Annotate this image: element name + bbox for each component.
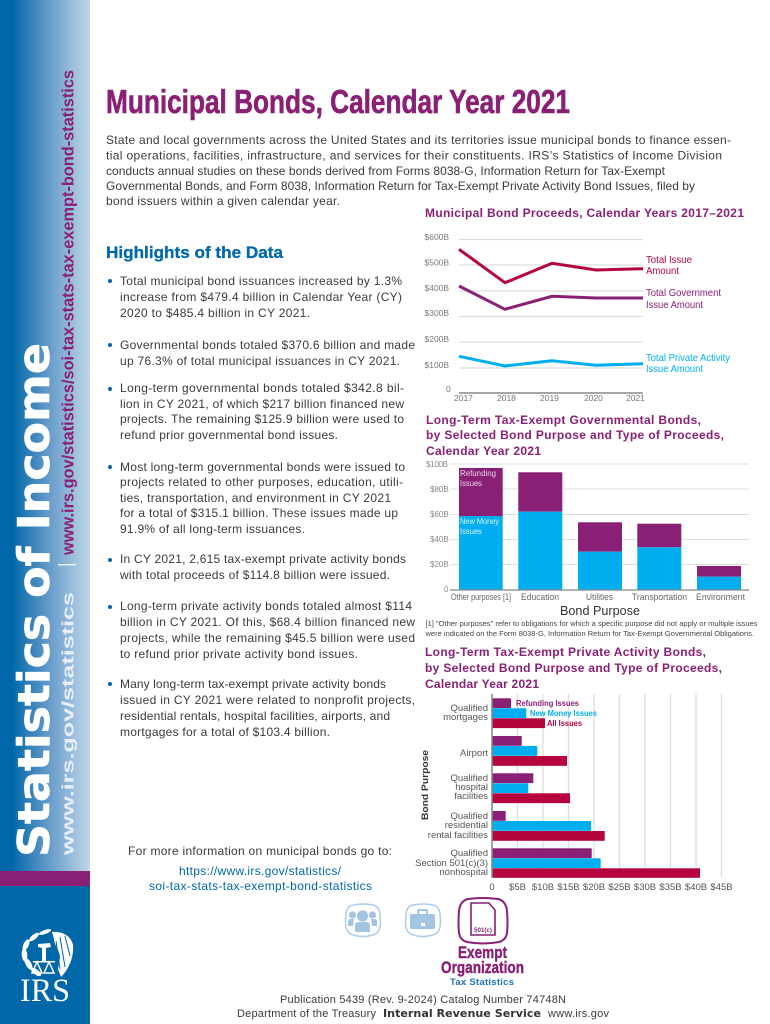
legend labels: All Issues xyxy=(547,719,583,728)
highlights bullet list: Governmental bonds totaled $370.6 billion and made xyxy=(120,338,415,352)
bars: hospital facilities xyxy=(492,773,570,803)
icon: people xyxy=(346,904,380,936)
bars: airport xyxy=(492,736,567,766)
bars: transportation xyxy=(637,524,681,590)
chart title xyxy=(426,413,724,458)
chart title: Long-Term Tax-Exempt Private Activity Bonds, xyxy=(425,645,706,659)
sidebar url: bond statistics: www.irs.gov/statistics/soi-tax-stats-tax-exempt-bond-statistics xyxy=(58,70,78,556)
line: total government issue amount xyxy=(459,286,643,309)
category labels: mortgages xyxy=(443,712,488,723)
heading: highlights: Highlights of the Data xyxy=(106,243,284,262)
line chart panel: 2019 xyxy=(540,393,559,403)
sidebar title: Statistics of Income: Statistics of Income xyxy=(9,343,60,857)
footer xyxy=(237,994,610,1020)
highlights bullet list: refund prior governmental bond issues. xyxy=(120,428,338,442)
highlights bullet list: Long-term private activity bonds totaled almost $114 xyxy=(120,599,412,613)
x axis ticks: $10B xyxy=(532,882,554,893)
chart title: Calendar Year 2021 xyxy=(426,444,541,458)
highlights bullet list: projects, while the remaining $45.5 billion were used xyxy=(120,631,415,645)
highlights bullet list: for a total of $315.1 billion. These issues made up xyxy=(120,506,398,520)
line: total private activity issue amount xyxy=(459,356,643,366)
category labels: nonhospital xyxy=(439,867,488,878)
icon: 501(c) document xyxy=(458,898,508,944)
category labels xyxy=(451,592,745,603)
bar labels: Refunding xyxy=(460,468,496,478)
program name: exempt organization: Organization xyxy=(441,958,524,977)
category labels: Environment xyxy=(696,592,745,603)
x axis ticks: $25B xyxy=(608,882,631,893)
governmental bonds stacked bar chart: $60B xyxy=(430,510,449,519)
program name: exempt organization xyxy=(441,943,524,988)
x axis ticks: $35B xyxy=(659,882,682,893)
IRS logo xyxy=(20,928,73,1009)
sidebar url: statistics: www.irs.gov/statistics xyxy=(58,592,78,856)
bar labels: Issues xyxy=(460,526,482,536)
more information links: For more information on municipal bonds go to: xyxy=(128,844,392,858)
category labels: Qualified xyxy=(450,703,488,714)
line chart panel: $600B xyxy=(424,232,449,242)
more information links: soi-tax-stats-tax-exempt-bond-statistics xyxy=(149,879,372,893)
x axis ticks: $40B xyxy=(685,882,707,893)
line chart panel: 2018 xyxy=(497,393,516,403)
category labels: Utilities xyxy=(586,592,613,603)
chart title: by Selected Bond Purpose and Type of Proceeds, xyxy=(426,428,724,442)
category labels: Airport xyxy=(460,748,488,759)
bars: education xyxy=(518,472,562,590)
category labels: Section 501(c)(3) xyxy=(415,858,488,869)
highlights bullet list: issued in CY 2021 were related to nonprofit projects, xyxy=(120,693,415,707)
category labels: Other purposes [1] xyxy=(451,592,511,603)
series labels: Total Issue xyxy=(646,254,692,266)
highlights bullet list: with total proceeds of $114.8 billion were issued. xyxy=(119,568,390,582)
governmental bonds stacked bar chart xyxy=(424,413,758,638)
icon: briefcase xyxy=(406,904,440,936)
line: total issue amount xyxy=(459,249,643,283)
x axis ticks: $5B xyxy=(509,882,526,893)
highlights bullet list: 91.9% of all long-term issuances. xyxy=(120,522,305,536)
series labels: Total Private Activity xyxy=(646,352,731,364)
category labels: Qualified xyxy=(450,848,488,859)
bar labels xyxy=(460,468,500,536)
intro paragraph: tial operations, facilities, infrastructure, and services for their constituents. IRS’s Statistics of Income Division xyxy=(106,148,722,162)
bars: other purposes xyxy=(459,468,503,590)
chart title: Long-Term Tax-Exempt Governmental Bonds, xyxy=(426,413,701,427)
highlights bullet list: Many long-term tax-exempt private activity bonds xyxy=(120,677,386,691)
category labels: residential xyxy=(445,820,488,831)
highlights bullet list: up 76.3% of total municipal issuances in CY 2021. xyxy=(120,354,400,368)
category labels: Education xyxy=(521,592,559,603)
footer: Publication 5439 (Rev. 9-2024) Catalog Number 74748N xyxy=(280,994,566,1006)
bars: residential rental facilities xyxy=(492,811,605,841)
line chart panel: 2020 xyxy=(584,393,603,403)
highlights bullet list: projects related to other purposes, education, utili- xyxy=(120,475,403,489)
private activity bonds bar chart xyxy=(415,645,733,893)
sidebar separator xyxy=(58,564,76,566)
series labels: Amount xyxy=(646,265,679,277)
highlights bullet list: residential rentals, hospital facilities, airports, and xyxy=(120,709,390,723)
series labels: Issue Amount xyxy=(646,363,703,375)
title: Municipal Bonds, Calendar Year 2021 xyxy=(106,83,570,120)
highlights bullet list xyxy=(108,274,415,739)
highlights bullet list: mortgages for a total of $103.4 billion. xyxy=(120,725,330,739)
highlights bullet list: Long-term governmental bonds totaled $342.8 bil- xyxy=(120,381,404,395)
line chart panel: $400B xyxy=(424,283,449,293)
highlights bullet list: In CY 2021, 2,615 tax-exempt private activity bonds xyxy=(120,552,406,566)
program name: exempt organization: Tax Statistics xyxy=(450,977,514,988)
legend labels: Refunding Issues xyxy=(516,699,580,708)
intro paragraph: conducts annual studies on these bonds derived from Forms 8038-G, Information Return for Tax-Exempt xyxy=(106,164,666,178)
legend labels: New Money Issues xyxy=(530,709,598,718)
series labels: Total Government xyxy=(646,287,721,299)
category labels: facilities xyxy=(454,791,488,802)
governmental bonds stacked bar chart: $40B xyxy=(430,535,449,544)
governmental bonds stacked bar chart: $100B xyxy=(426,460,448,469)
intro paragraph xyxy=(106,133,731,208)
line chart panel xyxy=(424,206,744,403)
line chart panel: 2017 xyxy=(454,393,473,403)
intro paragraph: State and local governments across the United States and its territories issue municipal bonds to finance essen- xyxy=(106,133,731,147)
intro paragraph: bond issuers within a given calendar year. xyxy=(106,194,340,208)
category labels: Qualified xyxy=(450,811,488,822)
line chart panel: $200B xyxy=(424,334,449,344)
category labels: Transportation xyxy=(632,592,687,603)
highlights bullet list: to refund prior private activity bond issues. xyxy=(120,647,358,661)
y axis title: Bond Purpose xyxy=(420,750,431,820)
highlights bullet list: increase from $479.4 billion in Calendar Year (CY) xyxy=(120,290,402,304)
category labels: rental facilities xyxy=(428,830,488,841)
highlights bullet list: lion in CY 2021, of which $217 billion financed new xyxy=(120,397,404,411)
bars: section 501(c)(3) nonhospital xyxy=(492,848,700,878)
bar labels: Issues xyxy=(460,478,482,488)
footnote: were indicated on the Form 8038-G, Information Return for Tax-Exempt Governmental Obligations. xyxy=(424,629,754,638)
legend labels xyxy=(516,699,598,728)
category labels: Qualified xyxy=(450,773,488,784)
IRS logo: IRS xyxy=(20,973,70,1009)
series labels: Issue Amount xyxy=(646,299,703,311)
x axis ticks xyxy=(489,882,733,893)
footnote xyxy=(424,619,758,638)
line chart panel: 0 xyxy=(446,384,451,394)
highlights bullet list: Total municipal bond issuances increased by 1.3% xyxy=(120,274,402,288)
footnote: [1] "Other purposes" refer to obligations for which a specific purpose did not apply or multiple issues xyxy=(426,619,758,628)
line chart panel: $300B xyxy=(424,308,449,318)
more information links xyxy=(128,844,392,893)
highlights bullet list: billion in CY 2021. Of this, $68.4 billion financed new xyxy=(120,615,415,629)
chart title xyxy=(425,645,722,691)
footer: www.irs.gov xyxy=(547,1008,610,1020)
highlights bullet list: projects. The remaining $125.9 billion were used to xyxy=(120,412,404,426)
x axis ticks: $45B xyxy=(710,882,733,893)
governmental bonds stacked bar chart: $80B xyxy=(430,485,449,494)
governmental bonds stacked bar chart: 0 xyxy=(444,585,449,594)
intro paragraph: Governmental Bonds, and Form 8038, Information Return for Tax-Exempt Private Activity Bond Issues, filed by xyxy=(106,179,695,193)
line chart panel: 2021 xyxy=(626,393,645,403)
series labels xyxy=(646,254,731,375)
category labels xyxy=(415,703,488,878)
line chart title: Municipal Bond Proceeds, Calendar Years 2017–2021 xyxy=(425,206,744,220)
sidebar xyxy=(0,0,90,1024)
chart title: Calendar Year 2021 xyxy=(425,677,539,691)
bars: environment xyxy=(697,566,741,590)
footer: Internal Revenue Service xyxy=(383,1008,541,1020)
x axis ticks: $20B xyxy=(583,882,605,893)
highlights bullet list: ties, transportation, and environment in CY 2021 xyxy=(120,491,391,505)
x axis ticks: $30B xyxy=(634,882,656,893)
x axis ticks: 0 xyxy=(489,882,495,893)
icon: 501(c) document: 501(c) xyxy=(474,927,492,934)
highlights bullet list: Most long-term governmental bonds were issued to xyxy=(120,460,405,474)
chart title: by Selected Bond Purpose and Type of Proceeds, xyxy=(425,661,722,675)
bar labels: New Money xyxy=(460,516,500,526)
x axis ticks: $15B xyxy=(557,882,580,893)
footer: Department of the Treasury xyxy=(237,1008,376,1020)
line chart panel: $100B xyxy=(424,360,449,370)
highlights bullet list: 2020 to $485.4 billion in CY 2021. xyxy=(120,306,310,320)
governmental bonds stacked bar chart: $20B xyxy=(430,560,449,569)
bars: utilities xyxy=(578,522,622,590)
more information links: https://www.irs.gov/statistics/ xyxy=(179,864,342,878)
axis title: Bond Purpose xyxy=(560,604,640,618)
program name: exempt organization: Exempt xyxy=(458,943,507,962)
category labels: hospital xyxy=(455,782,488,793)
bars: qualified mortgages xyxy=(492,698,545,728)
line chart panel: $500B xyxy=(424,258,449,268)
